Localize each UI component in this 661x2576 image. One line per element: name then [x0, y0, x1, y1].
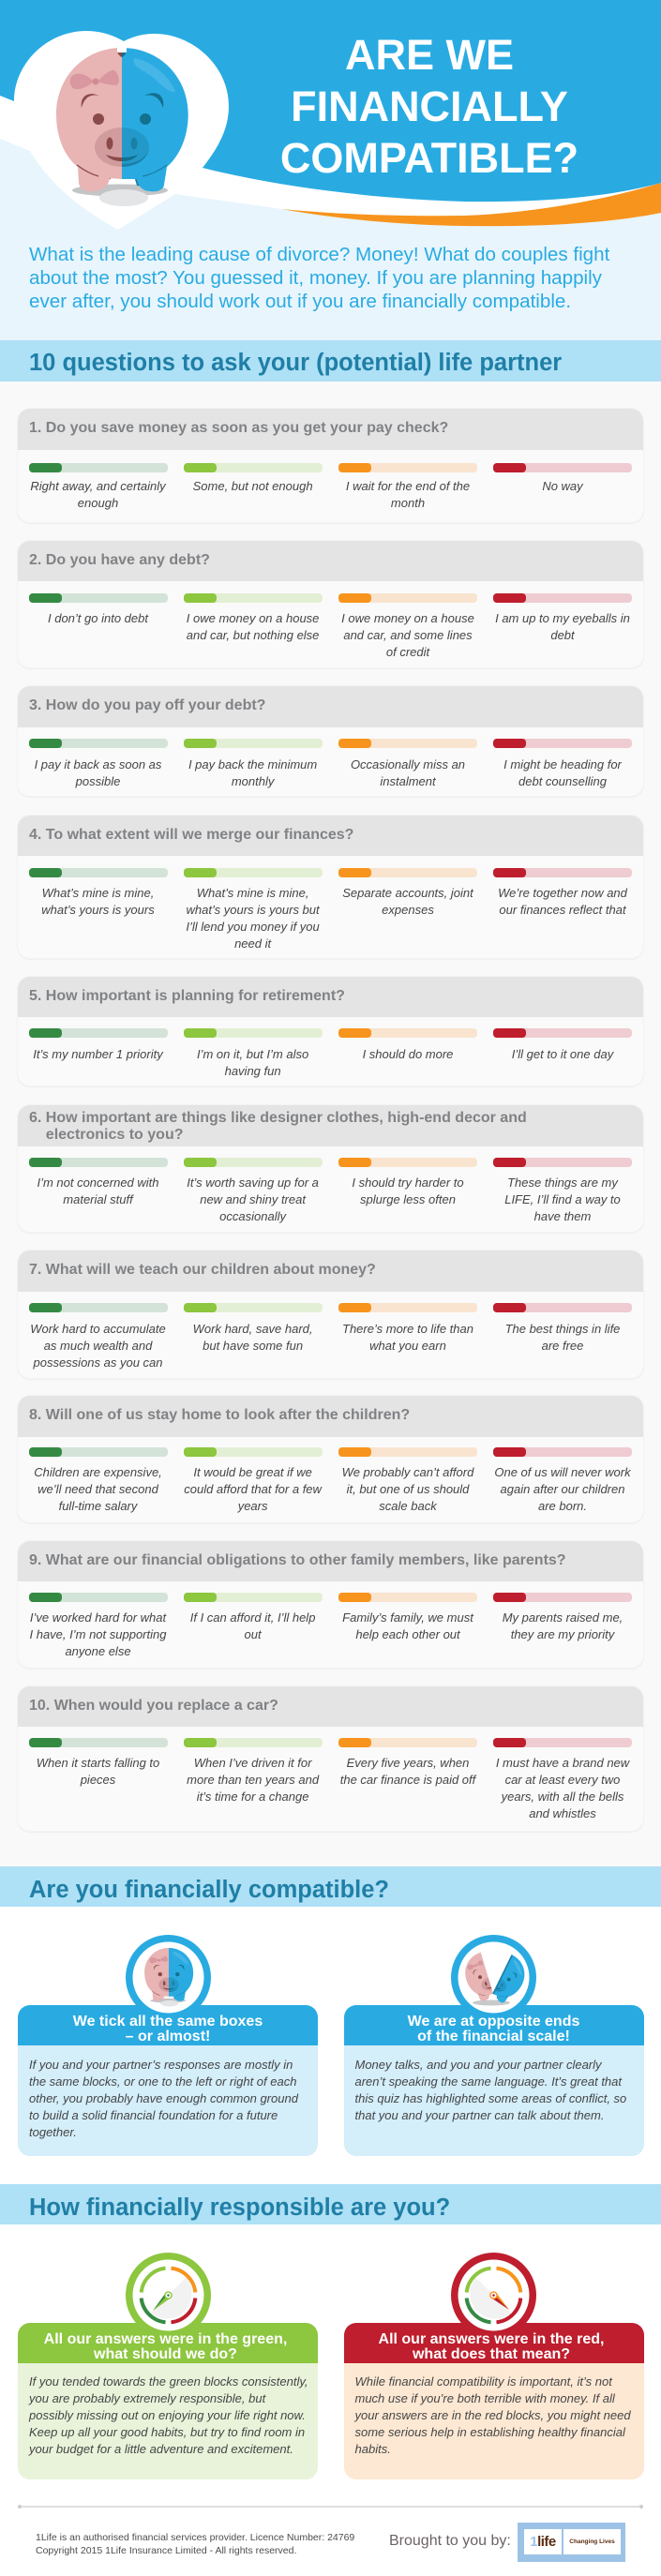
answer: red: they are my priority	[511, 1627, 614, 1640]
question 1 heading	[18, 409, 643, 450]
answer: green: I’ve worked hard for what	[30, 1610, 166, 1624]
section heading: how financially responsible: How financially responsible are you?	[29, 2194, 450, 2221]
answer: light green: out	[245, 1627, 262, 1640]
title: ARE WE	[345, 31, 514, 79]
logo tagline: Changing Lives	[569, 2539, 615, 2545]
answer: green: what’s yours is yours	[41, 902, 155, 917]
panel body text: that you and your partner can talk about them.	[354, 2107, 604, 2122]
quiz background	[0, 382, 661, 1866]
panel heading: We are at opposite ends	[408, 2014, 579, 2029]
answer: red	[493, 593, 632, 641]
question card 7	[18, 1251, 643, 1378]
answer: orange	[338, 1593, 477, 1640]
panel body text: Money talks, and you and your partner clearly	[354, 2057, 602, 2072]
question card 4	[18, 816, 643, 958]
answer: green	[29, 1028, 168, 1061]
icon ring	[126, 1935, 210, 2020]
panel heading: what should we do?	[94, 2345, 237, 2362]
intro text: ever after, you should work out if you are financially compatible.	[29, 291, 571, 312]
question card 5	[18, 977, 643, 1086]
answer: green: I don’t go into debt	[48, 611, 148, 624]
panel body text: If you and your partner’s responses are mostly in	[29, 2057, 293, 2072]
section heading: are you financially compatible	[0, 1866, 661, 1907]
answer: orange: We probably can’t afford	[342, 1464, 473, 1479]
answer: light green: years	[238, 1498, 267, 1513]
question card 10	[18, 1686, 643, 1831]
answer: red	[493, 1303, 632, 1352]
answer: green	[29, 463, 168, 510]
question card 2	[18, 541, 643, 667]
panel heading	[18, 2323, 318, 2363]
section heading: how financially responsible	[0, 2184, 661, 2224]
answer: green: full-time salary	[59, 1498, 137, 1513]
answer: green	[29, 593, 168, 624]
answer: green	[29, 1447, 168, 1513]
answer: red: have them	[534, 1209, 591, 1222]
answer: orange: I owe money on a house	[341, 611, 474, 624]
answer: green: enough	[78, 495, 118, 510]
panel: same boxes	[18, 1935, 318, 2156]
question 3 heading	[18, 686, 643, 727]
answer: light green: It would be great if we	[193, 1464, 312, 1479]
panel body text: your answers are in the red blocks, you might need	[354, 2407, 631, 2422]
panel body text: this quiz has highlighted some areas of conflict, so	[354, 2090, 626, 2105]
question 7 heading	[18, 1251, 643, 1292]
answer: light green: having fun	[225, 1063, 281, 1078]
answer: light green: it’s time for a change	[197, 1789, 308, 1804]
question 4 heading: 4. To what extent will we merge our finances?	[29, 827, 353, 842]
answer: red: debt	[550, 628, 575, 641]
panel: in the red	[343, 2253, 643, 2479]
question card 3	[18, 686, 643, 796]
answer: red	[493, 1738, 632, 1831]
answer: red: and whistles	[529, 1805, 596, 1820]
question 7 heading: 7. What will we teach our children about money?	[29, 1262, 376, 1277]
answer: light green: but have some fun	[203, 1339, 303, 1352]
answer: red: our finances reflect that	[499, 902, 626, 917]
title: COMPATIBLE?	[280, 134, 578, 182]
answer: green: Children are expensive,	[34, 1464, 162, 1479]
answer: green: we’ll need that second	[38, 1481, 158, 1496]
question 2 heading	[18, 541, 643, 581]
blue header shape	[0, 0, 661, 202]
answer: light green: I’m on it, but I’m also	[197, 1046, 308, 1061]
panel body text: your budget for a little adventure and excitement.	[29, 2441, 293, 2456]
answer: light green: I pay back the minimum	[188, 757, 317, 771]
answer: red: No way	[542, 478, 583, 493]
orange swoosh	[282, 183, 661, 226]
answer: orange: instalment	[380, 774, 436, 787]
question 6 heading: electronics to you?	[46, 1127, 184, 1142]
answer: red: are free	[542, 1339, 583, 1352]
answer: orange: expenses	[382, 902, 434, 917]
answer: light green	[184, 1738, 323, 1831]
answer: light green: I owe money on a house	[187, 611, 319, 624]
panel heading: – or almost!	[126, 2029, 210, 2044]
answer: green: pieces	[81, 1772, 115, 1787]
header illustration	[0, 0, 661, 340]
answer: red	[493, 868, 632, 917]
icon ring	[451, 1935, 536, 2020]
panel heading	[343, 2005, 643, 2045]
answer: green	[29, 739, 168, 787]
answer: orange	[338, 1303, 477, 1352]
answer: red	[493, 463, 632, 493]
answer: orange	[338, 593, 477, 658]
panel body text: While financial compatibility is important, it’s not	[354, 2374, 612, 2389]
logo mark	[524, 2529, 562, 2554]
panel body text: the same blocks, or one to the left or right of each	[29, 2074, 296, 2089]
answer: green	[29, 1593, 168, 1657]
logo mark: 1life	[530, 2534, 556, 2550]
answer: red: debt counselling	[518, 774, 607, 787]
panel heading: All our answers were in the red,	[379, 2330, 604, 2347]
answer: orange	[338, 463, 477, 510]
question card 8	[18, 1396, 643, 1522]
question 9 heading	[18, 1541, 643, 1581]
panel heading: of the financial scale!	[417, 2029, 570, 2044]
icon ring	[451, 2253, 536, 2338]
icon: whole piggy bank	[126, 1935, 210, 2020]
answer: orange	[338, 1158, 477, 1206]
answer: light green: more than ten years and	[187, 1772, 319, 1787]
answer: red: LIFE, I’ll find a way to	[504, 1192, 621, 1206]
footer legal text: 1Life is an authorised financial services provider. Licence Number: 24769	[36, 2532, 354, 2543]
intro text	[29, 244, 609, 312]
logo tagline	[563, 2529, 621, 2554]
panel body text	[18, 2045, 318, 2156]
panel body text: to build a solid financial foundation for a future	[29, 2107, 278, 2122]
answer: orange: Occasionally miss an	[351, 757, 465, 771]
answer: light green	[184, 1447, 323, 1513]
answer: green: possible	[76, 774, 120, 787]
answer: light green	[184, 463, 323, 493]
answer: orange: splurge less often	[360, 1192, 456, 1206]
panel body text: aren’t speaking the same language. It’s great that	[354, 2074, 622, 2089]
answer: orange: and car, and some lines	[343, 628, 473, 641]
answer: light green: When I’ve driven it for	[194, 1755, 311, 1770]
icon: gauge pointing red	[451, 2253, 536, 2338]
answer: red: These things are my	[507, 1176, 618, 1189]
answer: orange: I should try harder to	[352, 1176, 464, 1189]
answer: orange: Every five years, when	[347, 1755, 469, 1770]
panel body text: habits.	[354, 2441, 391, 2456]
answer: red: We’re together now and	[498, 885, 627, 900]
answer: light green	[184, 1303, 323, 1352]
answer: light green: and car, but nothing else	[187, 628, 319, 641]
panel heading: We tick all the same boxes	[73, 2014, 263, 2029]
answer: green: It’s my number 1 priority	[33, 1046, 163, 1061]
panel body text	[18, 2363, 318, 2479]
answer: light green: occasionally	[219, 1209, 286, 1222]
panel body text: If you tended towards the green blocks consistently,	[29, 2374, 308, 2389]
answer: light green: what’s yours is yours but	[187, 902, 320, 917]
answer: green: I have, I’m not supporting	[30, 1627, 166, 1640]
answer: green: material stuff	[63, 1192, 133, 1206]
answer: light green: could afford that for a few	[184, 1481, 322, 1496]
panel body text	[343, 2363, 643, 2479]
answer: green: as much wealth and	[44, 1339, 152, 1352]
panel body text: Keep up all your good habits, but try to find room in	[29, 2424, 305, 2439]
answer: red	[493, 1158, 632, 1222]
section heading: are you financially compatible: Are you financially compatible?	[29, 1877, 389, 1903]
panel body text: you are probably extremely responsible, but	[29, 2390, 265, 2405]
answer: orange: I should do more	[363, 1046, 453, 1061]
answer: light green	[184, 1028, 323, 1078]
panel body text: possibly missing out on enjoying your life right now.	[29, 2407, 306, 2422]
answer: light green: Work hard, save hard,	[193, 1322, 313, 1335]
answer: light green	[184, 868, 323, 951]
question card 1	[18, 409, 643, 522]
panel: in the green	[18, 2253, 318, 2479]
panel heading: All our answers were in the green,	[44, 2330, 287, 2347]
answer: light green: Some, but not enough	[193, 478, 313, 493]
white heart	[14, 31, 229, 230]
answer: red: again after our children	[501, 1481, 624, 1496]
answer: light green	[184, 739, 323, 787]
icon: piggy bank	[56, 48, 188, 206]
question 10 heading	[18, 1686, 643, 1727]
panel body text: much use if you’re both terrible with money. If all	[354, 2390, 615, 2405]
footer legal text	[36, 2531, 354, 2557]
panel body text	[343, 2045, 643, 2156]
section heading: 10 questions: 10 questions to ask your (potential) life partner	[29, 350, 562, 376]
section heading: 10 questions	[0, 340, 661, 382]
answer: light green: If I can afford it, I’ll help	[190, 1610, 315, 1624]
answer: light green	[184, 1158, 323, 1222]
answer: red: My parents raised me,	[503, 1610, 623, 1624]
answer: red: The best things in life	[505, 1322, 620, 1335]
logo: 1Life	[518, 2523, 625, 2562]
answer: green: possessions as you can	[33, 1355, 163, 1369]
question 5 heading	[18, 977, 643, 1017]
answer: red	[493, 1593, 632, 1640]
answer: light green: I’ll lend you money if you	[186, 919, 320, 934]
panel body text: some serious help in establishing healthy financial	[354, 2424, 625, 2439]
answer: orange: month	[391, 495, 425, 510]
panel body text: together.	[29, 2124, 77, 2139]
question 6 heading	[18, 1105, 643, 1146]
question card 9	[18, 1541, 643, 1668]
title: FINANCIALLY	[291, 82, 568, 130]
answer: green: What’s mine is mine,	[42, 885, 154, 900]
question 5 heading: 5. How important is planning for retirement?	[29, 988, 345, 1003]
answer: red	[493, 1028, 632, 1061]
question 1 heading: 1. Do you save money as soon as you get your pay check?	[29, 420, 448, 435]
answer: orange: scale back	[379, 1498, 437, 1513]
answer: orange: There’s more to life than	[342, 1322, 473, 1335]
answer: red: car at least every two	[505, 1772, 620, 1787]
answer: green: When it starts falling to	[37, 1755, 159, 1770]
answer: light green: It’s worth saving up for a	[187, 1176, 319, 1189]
answer: orange: the car finance is paid off	[340, 1772, 475, 1787]
answer: red: I am up to my eyeballs in	[495, 611, 630, 624]
intro text: What is the leading cause of divorce? Money! What do couples fight	[29, 244, 609, 265]
question 4 heading	[18, 816, 643, 856]
question 6 heading: 6. How important are things like designer clothes, high-end decor and	[29, 1110, 527, 1125]
answer: red: I’ll get to it one day	[512, 1046, 613, 1061]
question 2 heading: 2. Do you have any debt?	[29, 551, 210, 568]
question 10 heading: 10. When would you replace a car?	[29, 1697, 278, 1714]
panel heading: what does that mean?	[413, 2345, 570, 2362]
answer: light green: What’s mine is mine,	[197, 885, 308, 900]
answer: green: Work hard to accumulate	[30, 1322, 166, 1335]
answer: red: I must have a brand new	[496, 1755, 629, 1770]
answer: orange: what you earn	[369, 1339, 446, 1352]
question 8 heading: 8. Will one of us stay home to look after the children?	[29, 1406, 410, 1423]
answer: orange	[338, 868, 477, 917]
answer: green	[29, 1738, 168, 1787]
footer legal text: Copyright 2015 1Life Insurance Limited - All rights reserved.	[36, 2545, 296, 2556]
question 9 heading: 9. What are our financial obligations to other family members, like parents?	[29, 1552, 566, 1567]
answer: orange	[338, 1738, 477, 1831]
answer: orange: help each other out	[355, 1627, 460, 1640]
answer: light green	[184, 593, 323, 641]
answer: orange	[338, 1447, 477, 1513]
answer: orange: it, but one of us should	[347, 1481, 469, 1496]
intro text: about the most? You guessed it, money. If you are planning happily	[29, 267, 602, 289]
answer: red: I might be heading for	[503, 757, 622, 771]
answer: green: anyone else	[65, 1644, 131, 1657]
answer: green: I’m not concerned with	[37, 1176, 159, 1189]
icon: split piggy bank	[451, 1935, 536, 2020]
answer: light green: need it	[234, 936, 271, 951]
panel heading	[343, 2323, 643, 2363]
panel: opposite ends	[343, 1935, 643, 2156]
answer: light green	[184, 1593, 323, 1640]
answer: green	[29, 1303, 168, 1369]
answer: orange: Family’s family, we must	[342, 1610, 473, 1624]
panel heading	[18, 2005, 318, 2045]
answer: green	[29, 1158, 168, 1206]
answer: red: are born.	[538, 1498, 587, 1513]
question 3 heading: 3. How do you pay off your debt?	[29, 697, 265, 712]
answer: light green: new and shiny treat	[200, 1192, 306, 1206]
panel body text: other, you probably have enough common ground	[29, 2090, 298, 2105]
icon ring	[126, 2253, 210, 2338]
answer: green: Right away, and certainly	[30, 478, 166, 493]
answer: red: One of us will never work	[494, 1464, 631, 1479]
answer: light green: monthly	[232, 774, 274, 787]
brought to you by: Brought to you by:	[389, 2533, 511, 2549]
answer: green	[29, 868, 168, 917]
question card 6	[18, 1105, 643, 1232]
icon: gauge pointing green	[126, 2253, 210, 2338]
answer: green: I pay it back as soon as	[35, 757, 161, 771]
answer: red: years, with all the bells	[502, 1789, 623, 1804]
answer: orange: Separate accounts, joint	[342, 885, 473, 900]
answer: orange	[338, 739, 477, 787]
answer: red	[493, 1447, 632, 1513]
answer: orange: of credit	[386, 645, 429, 658]
answer: orange	[338, 1028, 477, 1061]
title	[280, 31, 578, 182]
question 8 heading	[18, 1396, 643, 1437]
answer: orange: I wait for the end of the	[346, 478, 470, 493]
answer: red	[493, 739, 632, 787]
